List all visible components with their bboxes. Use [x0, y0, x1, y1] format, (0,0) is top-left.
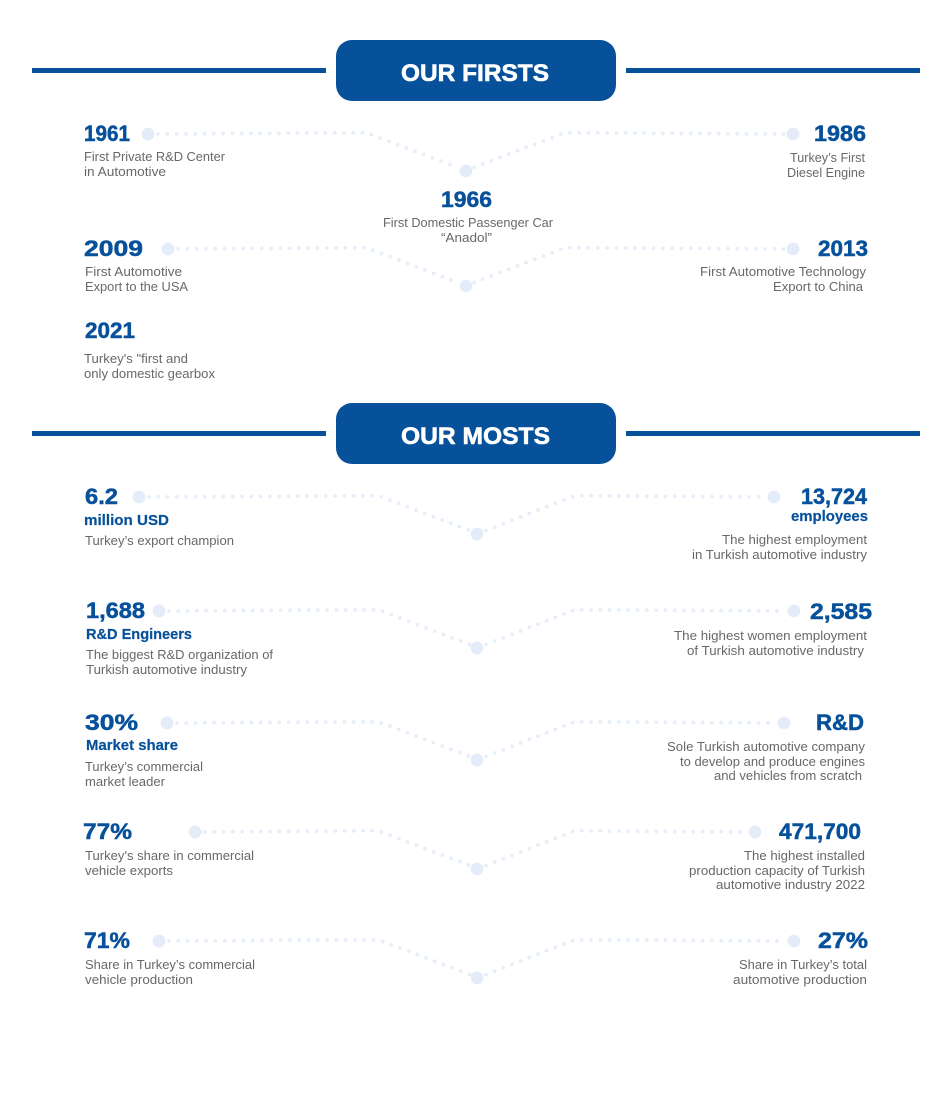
milestone: 1986 — [787, 121, 866, 180]
milestone: 2009: First Automotive — [85, 264, 182, 279]
milestone: 1961: in Automotive — [84, 164, 166, 179]
stat: 6.2 million USD: 6.2 — [85, 484, 118, 509]
stat: 71% commercial vehicle production: vehicle production — [85, 972, 193, 987]
connector row 3 — [161, 717, 790, 766]
milestone: 2009 — [84, 236, 188, 294]
stat: 13,724 employees — [692, 484, 868, 562]
section header: our mosts — [32, 403, 920, 464]
section header: our firsts — [32, 40, 920, 101]
milestone: 1966 — [383, 187, 554, 245]
stat: 27% total automotive production — [733, 928, 868, 987]
stat: 2,585 women employment: The highest women employment — [674, 628, 867, 643]
stat: 471,700 production capacity: production capacity of Turkish — [689, 863, 865, 878]
stat: 30% market share: Turkey’s commercial — [85, 759, 203, 774]
stat: 13,724 employees: The highest employment — [722, 532, 867, 547]
stat: R&D: Sole Turkish automotive company — [667, 739, 865, 754]
stat: 6.2 million USD: million USD — [84, 513, 169, 529]
stat: 30% market share — [85, 710, 203, 789]
stat: 1,688 R&D engineers: R&D Engineers — [86, 627, 192, 643]
stat: 471,700 production capacity: automotive industry 2022 — [716, 877, 865, 892]
stat: 30% market share: market leader — [85, 774, 166, 789]
connector row 5 — [153, 935, 800, 984]
stat: R&D: to develop and produce engines — [680, 754, 865, 769]
section header: our mosts: OUR MOSTS — [401, 423, 550, 450]
milestone: 2009: 2009 — [84, 236, 143, 261]
milestone: 2009: Export to the USA — [85, 279, 188, 294]
milestone: 2013: Export to China — [773, 279, 864, 294]
stat: 1,688 R&D engineers: 1,688 — [86, 598, 145, 623]
stat: R&D — [667, 710, 865, 783]
stat: 27% total automotive production: automotive production — [733, 972, 867, 987]
connector row 4 — [189, 826, 761, 875]
stat: 27% total automotive production: 27% — [818, 928, 868, 953]
stat: 13,724 employees: employees — [791, 509, 868, 525]
stat: 71% commercial vehicle production — [84, 928, 255, 987]
milestone: 2013: 2013 — [818, 236, 868, 261]
connector row 2 — [153, 605, 800, 654]
stat: R&D: and vehicles from scratch — [714, 768, 862, 783]
stat: 77% commercial vehicle exports — [83, 819, 254, 878]
stat: 77% commercial vehicle exports: vehicle exports — [85, 863, 173, 878]
stat: 77% commercial vehicle exports: 77% — [83, 819, 132, 844]
timeline connector: 2009 to 2013 — [162, 243, 799, 292]
stat: 471,700 production capacity — [689, 819, 865, 892]
stat: 1,688 R&D engineers: Turkish automotive industry — [86, 662, 247, 677]
milestone: 1986: 1986 — [814, 121, 866, 146]
stat: 471,700 production capacity: 471,700 — [779, 819, 861, 844]
stat: 30% market share: Market share — [86, 738, 178, 754]
connector row 1 — [133, 491, 780, 540]
stat: 1,688 R&D engineers — [86, 598, 273, 677]
milestone: 2013 — [700, 236, 868, 294]
milestone: 1966: First Domestic Passenger Car — [383, 215, 554, 230]
stat: 77% commercial vehicle exports: Turkey's share in commercial — [85, 848, 254, 863]
milestone: 2013: First Automotive Technology — [700, 264, 867, 279]
stat: 13,724 employees: 13,724 — [801, 484, 868, 509]
stat: 471,700 production capacity: The highest installed — [744, 848, 865, 863]
milestone: 1961: First Private R&D Center — [84, 149, 226, 164]
milestone: 1966: 1966 — [441, 187, 492, 212]
milestone: 1986: Turkey’s First — [790, 150, 865, 165]
stat: 6.2 million USD — [84, 484, 234, 548]
stat: 27% total automotive production: Share in Turkey’s total — [739, 957, 867, 972]
stat: 2,585 women employment — [674, 599, 872, 658]
milestone: 1986: Diesel Engine — [787, 165, 865, 180]
stat: 6.2 million USD: Turkey’s export champion — [85, 533, 234, 548]
stat: 71% commercial vehicle production: Share in Turkey’s commercial — [85, 957, 255, 972]
stat: 30% market share: 30% — [85, 710, 138, 735]
milestone: 2021: 2021 — [85, 318, 135, 343]
milestone: 2021: Turkey's "first and — [84, 351, 188, 366]
stat: 2,585 women employment: of Turkish automotive industry — [687, 643, 864, 658]
stat: 2,585 women employment: 2,585 — [810, 599, 872, 624]
stat: 71% commercial vehicle production: 71% — [84, 928, 130, 953]
section header: our firsts: OUR FIRSTS — [401, 60, 549, 87]
stat: 1,688 R&D engineers: The biggest R&D organization of — [86, 647, 273, 662]
milestone: 2021: only domestic gearbox — [84, 366, 215, 381]
stat: 13,724 employees: in Turkish automotive industry — [692, 547, 868, 562]
milestone: 1961: 1961 — [84, 121, 130, 146]
milestone: 1966: “Anadol” — [441, 230, 492, 245]
milestone: 1961 — [84, 121, 226, 179]
milestone: 2021 — [84, 318, 215, 381]
stat: R&D: R&D — [816, 710, 864, 735]
timeline connector: 1961 to 1986 — [142, 128, 799, 177]
